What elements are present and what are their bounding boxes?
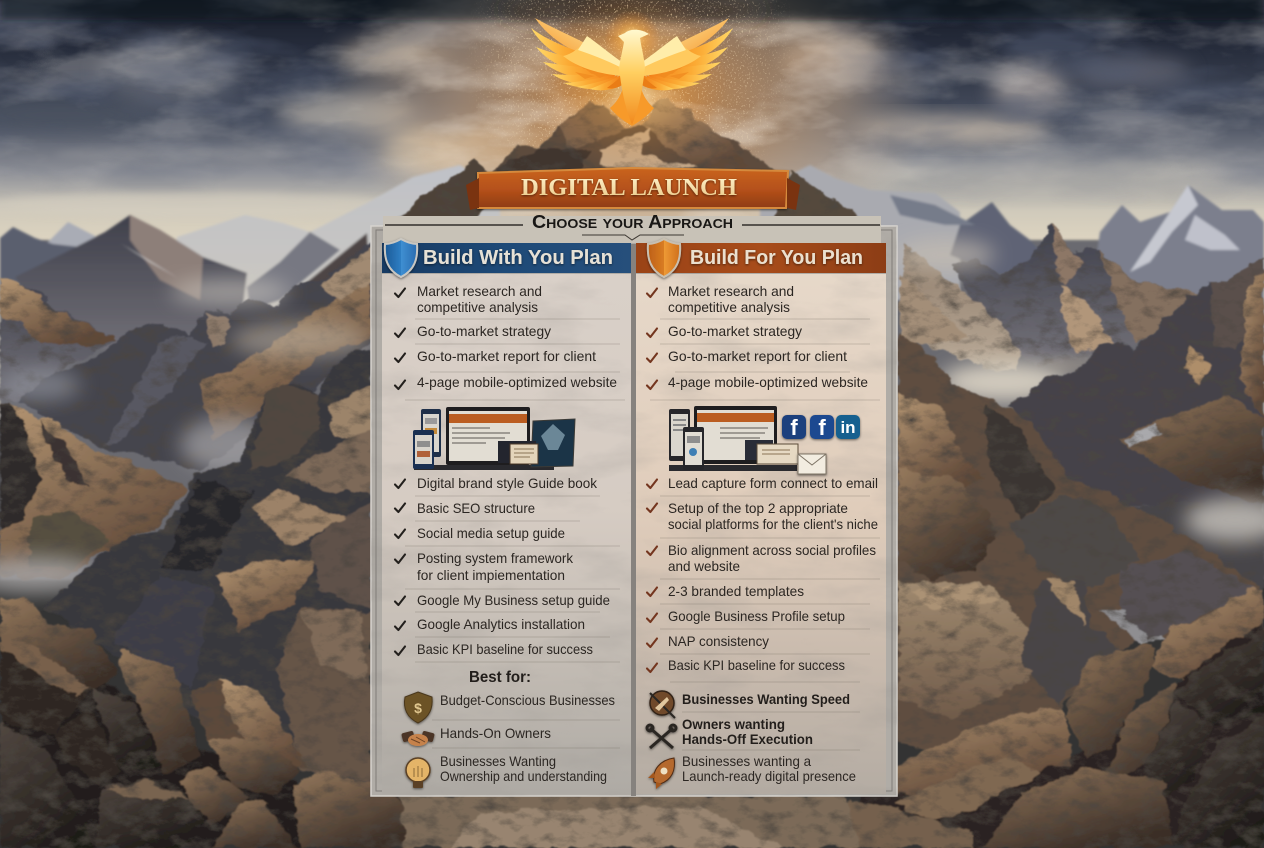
icon: handshake — [401, 731, 435, 746]
background: left dark crag — [43, 350, 372, 800]
icon: facebook badge: f — [790, 415, 798, 440]
background: left fog pool — [0, 557, 100, 593]
panel: right column — [636, 274, 886, 794]
panel: choose your approach board — [371, 212, 897, 796]
header: build with you plan: Build With You Plan — [423, 247, 613, 269]
background: right dark crag — [1008, 257, 1264, 640]
list: build for you items: Setup of the top 2 appropriate — [668, 500, 848, 516]
list: build with you items: for client impiementation — [417, 567, 565, 583]
best-for list: right: Hands-Off Execution — [682, 731, 813, 747]
title banner — [466, 168, 800, 210]
background: foreground boulders right — [840, 588, 1264, 848]
best-for list: left: Hands-On Owners — [440, 725, 551, 741]
icon: dollar shield — [404, 692, 432, 723]
best-for list: left: Businesses Wanting — [440, 753, 556, 769]
best-for list: right: Launch-ready digital presence — [682, 768, 856, 784]
icon: orange shield — [648, 239, 680, 277]
list: build for you items: Bio alignment across social profiles — [668, 542, 876, 558]
list separators — [405, 319, 880, 750]
list: build with you items — [395, 283, 617, 657]
header: build for you plan: Build For You Plan — [690, 247, 863, 269]
background: right fog pool — [1185, 498, 1264, 542]
header: build for you plan — [636, 243, 886, 273]
list: build for you items: 2-3 branded templates — [668, 583, 804, 599]
icon: right devices mockup with social badges — [669, 406, 860, 474]
list: build for you items: Go-to-market report for client — [668, 348, 847, 364]
background: foreground boulders left — [0, 597, 420, 848]
panel: left column — [382, 274, 632, 794]
list: build with you items: competitive analysis — [417, 299, 538, 315]
background: stone path — [400, 795, 860, 848]
paper texture — [382, 274, 886, 794]
icon: linkedin badge: in — [840, 418, 856, 437]
list: build for you items: Lead capture form connect to email — [668, 475, 878, 491]
icon: facebook badge second — [810, 415, 834, 440]
list: build with you items: 4-page mobile-optimized website — [417, 374, 617, 390]
icon: left devices mockup — [413, 407, 575, 470]
best-for list: right: Owners wanting — [682, 716, 785, 732]
icon: dollar shield: $ — [414, 700, 422, 716]
icon: facebook badge — [782, 415, 806, 440]
best-for list: left — [401, 692, 615, 788]
list: build with you items: Posting system framework — [417, 550, 574, 566]
list: build with you items: Basic KPI baseline for success — [417, 641, 593, 657]
icon: facebook badge second: f — [818, 415, 826, 440]
icon: rocket — [648, 758, 674, 789]
best-for list: right — [647, 691, 856, 789]
icon: phoenix — [531, 0, 733, 175]
icon: linkedin badge — [836, 415, 860, 439]
list: build with you items: Digital brand style Guide book — [417, 475, 598, 491]
list: build with you items: Google My Business setup guide — [417, 592, 610, 608]
list: build for you items: competitive analysis — [668, 299, 790, 315]
list: build with you items: Google Analytics installation — [417, 616, 585, 632]
background: sky and clouds — [0, 0, 1264, 420]
list: build for you items: Google Business Profile setup — [668, 608, 845, 624]
heading: best for: Best for: — [469, 669, 531, 686]
list: build for you items: Market research and — [668, 283, 794, 299]
list: build with you items: Market research and — [417, 283, 542, 299]
centre divider — [631, 244, 636, 796]
best-for list: right: Businesses wanting a — [682, 753, 811, 769]
best-for list: left: Budget-Conscious Businesses — [440, 692, 615, 708]
background: left valley fog — [0, 278, 370, 473]
list: build for you items — [647, 283, 878, 673]
list: build with you items: Basic SEO structure — [417, 500, 535, 516]
background: left mid mountains — [0, 240, 372, 470]
list: build for you items: social platforms for the client's niche — [668, 516, 878, 532]
top cap bar — [385, 216, 879, 230]
icon: speed compass — [650, 691, 675, 718]
background: far mountain range — [0, 165, 1264, 580]
subtitle: choose your approach — [385, 212, 880, 240]
list: build for you items: NAP consistency — [668, 633, 769, 649]
best-for list: right: Businesses Wanting Speed — [682, 691, 850, 707]
summit mountain — [395, 99, 870, 228]
list: build with you items: Go-to-market report for client — [417, 348, 596, 364]
subtitle: choose your approach: Choose your Approach — [532, 212, 733, 232]
best-for list: left: Ownership and understanding — [440, 768, 607, 784]
list: build for you items: Go-to-market strategy — [668, 323, 802, 339]
list: build for you items: and website — [668, 558, 740, 574]
icon: light bulb — [406, 758, 430, 788]
title banner: DIGITAL LAUNCH — [521, 175, 737, 201]
background: right valley fog — [895, 239, 1125, 402]
list: build for you items: 4-page mobile-optimized website — [668, 374, 868, 390]
background: right mid mountains — [900, 225, 1200, 372]
list: build with you items: Go-to-market strategy — [417, 323, 551, 339]
icon: crossed tools — [647, 725, 676, 748]
background: right near cliff — [895, 333, 1264, 760]
list: build with you items: Social media setup guide — [417, 525, 565, 541]
icon: blue shield — [385, 239, 417, 277]
header: build with you plan — [382, 243, 631, 273]
subtitle band — [383, 216, 881, 243]
panel frame — [371, 226, 897, 796]
background: left tan valley mountain — [0, 402, 187, 580]
list: build for you items: Basic KPI baseline for success — [668, 657, 845, 673]
